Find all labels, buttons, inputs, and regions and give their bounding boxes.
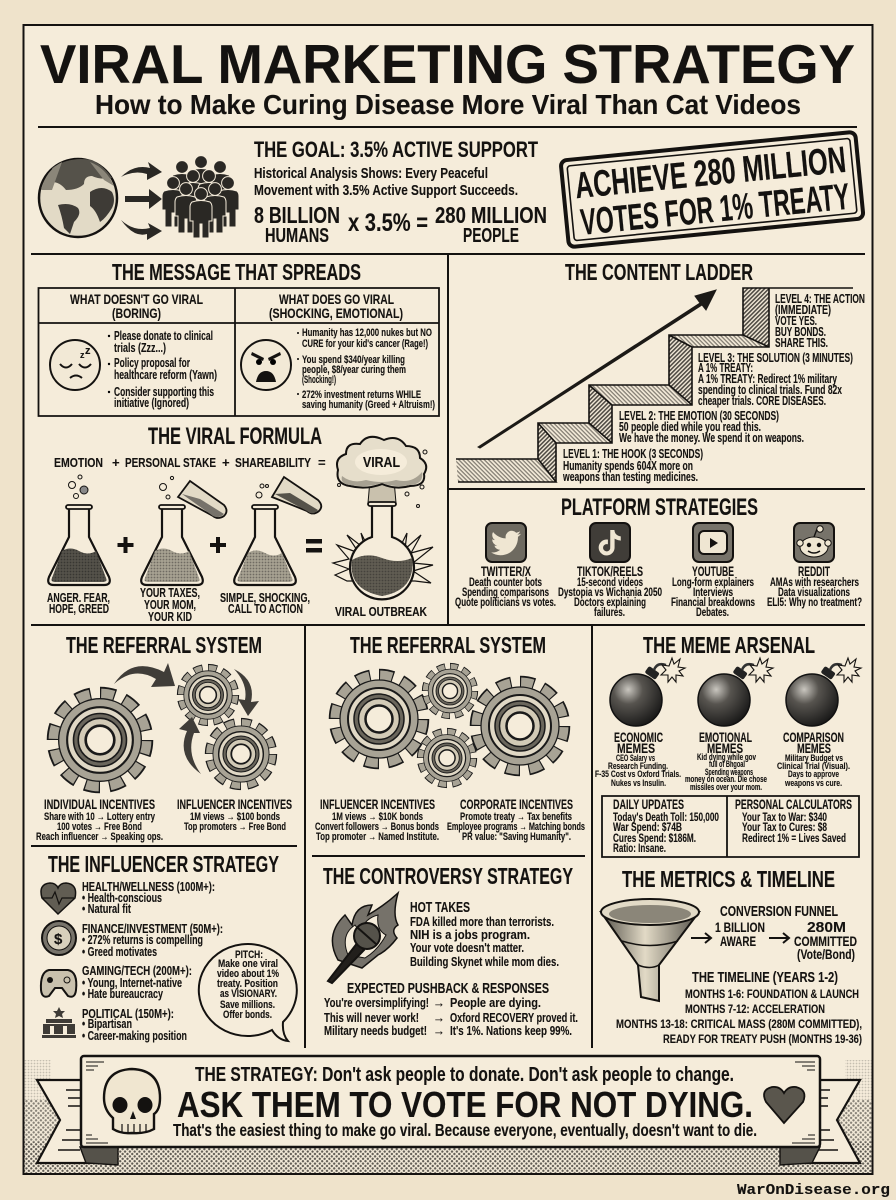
icon: skull — [104, 1069, 160, 1133]
list: viral messages: CURE for your kid's cancer (Rage!) — [302, 338, 428, 350]
formula text — [54, 455, 326, 470]
comparison table — [38, 288, 439, 416]
icon: bomb 1 — [610, 658, 685, 726]
flask labels — [47, 586, 310, 624]
individual incentives: Reach influencer → Speaking ops. — [36, 831, 163, 843]
icon: crowd of people — [162, 156, 239, 238]
panel: the content ladder — [456, 259, 865, 484]
corporate incentives: CORPORATE INCENTIVES — [460, 797, 573, 812]
timeline: THE TIMELINE (YEARS 1-2) — [692, 970, 838, 986]
tiktok text: TIKTOK/REELS — [577, 564, 643, 579]
level 2 text: LEVEL 2: THE EMOTION (30 SECONDS) — [619, 409, 779, 423]
list: viral messages — [297, 327, 435, 411]
list: viral messages: people, $8/year curing them — [302, 364, 406, 376]
twitter text: TWITTER/X — [481, 564, 531, 579]
flask labels: YOUR TAXES, — [140, 586, 200, 600]
hot takes: HOT TAKES — [410, 900, 470, 916]
equation: HUMANS — [265, 225, 329, 247]
reddit text: AMAs with researchers — [770, 577, 859, 589]
level 4 text: SHARE THIS. — [775, 336, 828, 350]
economic memes: ECONOMIC — [614, 730, 663, 745]
pitch speech bubble: Offer bonds. — [223, 1009, 272, 1021]
icon: angry face — [241, 340, 291, 390]
heading: THE VIRAL FORMULA — [148, 423, 322, 450]
twitter text: Spending comparisons — [462, 587, 549, 599]
youtube text: Interviews — [693, 587, 733, 599]
conversion funnel: COMMITTED — [794, 933, 857, 949]
comparison memes: Military Budget vs — [785, 753, 843, 764]
icon: game controller — [41, 970, 76, 997]
list: boring messages: Please donate to clinical — [114, 329, 213, 343]
influencer lists: POLITICAL (150M+): — [82, 1007, 174, 1021]
icon: sleepy face — [50, 340, 100, 390]
tiktok text: failures. — [594, 607, 625, 619]
list: viral messages: (Shocking!) — [302, 374, 336, 386]
reddit text: Data visualizations — [778, 587, 850, 599]
icon: sleepy face: z — [85, 345, 91, 357]
conversion funnel: 280M — [807, 919, 846, 936]
comparison memes: Clinical Trial (Visual). — [777, 761, 850, 772]
heading: THE CONTENT LADDER — [565, 259, 753, 285]
conversion funnel: AWARE — [720, 933, 756, 949]
banner: the strategy — [37, 1056, 860, 1165]
equation — [254, 202, 547, 247]
formula text: PERSONAL STAKE — [125, 455, 216, 470]
comparison table: WHAT DOESN'T GO VIRAL — [70, 292, 203, 307]
icon: heart — [41, 883, 76, 914]
comparison memes: Days to approve — [788, 769, 839, 780]
icon: sleepy face: z — [80, 350, 85, 360]
title: VIRAL MARKETING STRATEGY — [40, 33, 855, 95]
influencer lists: GAMING/TECH (200M+): — [82, 964, 192, 978]
conversion funnel — [691, 904, 857, 962]
flask 3: shareability — [234, 477, 321, 585]
comparison memes: weapons vs cure. — [784, 778, 842, 789]
influencer incentives: 1M views → $100 bonds — [190, 811, 280, 823]
list: boring messages: trials (Zzz...) — [114, 341, 166, 355]
pitch speech bubble: treaty. Position — [217, 978, 278, 990]
daily updates and calculators box: Your Tax to Cures: $8 — [742, 820, 827, 834]
panel: the influencer strategy — [41, 851, 297, 1043]
expected pushback and responses: EXPECTED PUSHBACK & RESPONSES — [347, 981, 549, 997]
list: viral messages: Humanity has 12,000 nukes but NO — [302, 327, 432, 339]
influencer lists: • Career-making position — [82, 1029, 187, 1043]
list: viral messages: 272% investment returns WHILE — [302, 389, 421, 401]
panel: the goal — [39, 132, 864, 247]
daily updates and calculators box: Redirect 1% = Lives Saved — [742, 831, 846, 845]
stair illustration — [456, 288, 853, 482]
panel: the meme arsenal — [595, 632, 861, 857]
pitch speech bubble: as VISIONARY. — [220, 988, 277, 1000]
equation: 8 BILLION — [254, 202, 340, 228]
twitter text — [455, 564, 556, 609]
daily updates and calculators box: Cures Spend: $186M. — [613, 831, 696, 845]
comparison table: (SHOCKING, EMOTIONAL) — [269, 306, 403, 321]
pitch speech bubble: Make one viral — [218, 958, 278, 970]
youtube text: Debates. — [696, 607, 729, 619]
daily updates and calculators box: DAILY UPDATES — [613, 797, 684, 812]
pitch speech bubble: video about 1% — [217, 968, 279, 980]
panel: the message that spreads — [38, 259, 439, 416]
goal explanation: Movement with 3.5% Active Support Succeeds. — [254, 183, 518, 199]
level 3 text: A 1% TREATY: — [698, 361, 753, 375]
influencer lists: • Hate bureaucracy — [82, 987, 163, 1001]
comparison memes: MEMES — [797, 741, 831, 756]
level 4 text: BUY BONDS. — [775, 325, 826, 339]
influencer lists: • Natural fit — [82, 902, 132, 916]
timeline: MONTHS 7-12: ACCELERATION — [685, 1002, 825, 1016]
goal heading: THE GOAL: 3.5% ACTIVE SUPPORT — [254, 137, 538, 162]
viral outbreak illustration: VIRAL — [363, 454, 400, 471]
level 4 text: (IMMEDIATE) — [775, 303, 831, 317]
ribbon body — [81, 1056, 820, 1147]
heading: THE MEME ARSENAL — [643, 632, 815, 658]
influencer lists — [82, 880, 223, 1043]
individual incentives: Share with 10 → Lottery entry — [44, 811, 156, 823]
pitch speech bubble — [199, 944, 297, 1041]
influencer lists: • Health-conscious — [82, 891, 162, 905]
heading: THE INFLUENCER STRATEGY — [48, 851, 279, 877]
level 2 text — [619, 409, 804, 445]
equation: PEOPLE — [463, 225, 519, 247]
level 2 text: We have the money. We spend it on weapons. — [619, 431, 804, 445]
comparison memes: COMPARISON — [783, 730, 844, 745]
corporate incentives: Employee programs → Matching bonds — [447, 821, 585, 833]
pitch speech bubble: PITCH: — [235, 949, 263, 961]
panel: the viral formula — [47, 423, 433, 624]
equation: x 3.5% = — [348, 209, 428, 237]
icon: flaming microphone — [328, 893, 398, 983]
emotional memes: EMOTIONAL — [699, 730, 752, 745]
daily updates and calculators box: Your Tax to War: $340 — [742, 810, 827, 824]
list: boring messages — [108, 329, 217, 410]
viral outbreak illustration — [333, 437, 433, 599]
subtitle: How to Make Curing Disease More Viral Than Cat Videos — [95, 89, 801, 120]
daily updates and calculators box: Ratio: Insane. — [613, 841, 666, 855]
flask 1: emotion — [48, 475, 110, 585]
headline: ASK THEM TO VOTE FOR NOT DYING. — [177, 1084, 753, 1125]
flask labels: YOUR MOM, — [144, 598, 196, 612]
arrow: upward trend — [478, 290, 716, 448]
emotional memes: MEMES — [707, 741, 743, 756]
youtube text: Long-form explainers — [672, 577, 754, 589]
icon: interlocking gears — [335, 666, 564, 784]
level 3 text — [698, 351, 853, 408]
level 4 text — [775, 292, 865, 350]
arrows: world to people — [121, 162, 162, 240]
influencer incentives — [315, 797, 439, 843]
icon: bomb 3 — [786, 658, 861, 726]
youtube text: YOUTUBE — [692, 564, 734, 579]
expected pushback and responses: → — [433, 1023, 445, 1038]
list: boring messages: healthcare reform (Yawn) — [114, 368, 217, 382]
emotional memes — [685, 730, 767, 792]
reddit text — [767, 564, 862, 609]
operators — [118, 537, 322, 553]
panel: referral system, individual — [36, 632, 292, 843]
influencer incentives: INFLUENCER INCENTIVES — [320, 797, 435, 812]
twitter text: Quote politicians vs votes. — [455, 597, 556, 609]
timeline — [616, 970, 862, 1046]
formula text: = — [318, 455, 326, 470]
individual incentives: 100 votes → Free Bond — [57, 821, 142, 833]
individual incentives: INDIVIDUAL INCENTIVES — [44, 797, 155, 812]
influencer lists: • 272% returns is compelling — [82, 933, 203, 947]
expected pushback and responses: → — [433, 995, 445, 1010]
emotional memes: Spending weapons — [705, 767, 753, 777]
conversion funnel: 1 BILLION — [715, 919, 765, 935]
ribbon tails — [37, 1080, 860, 1165]
economic memes: Nukes vs Insulin. — [611, 778, 666, 789]
hot takes: Your vote doesn't matter. — [410, 940, 524, 955]
heading: THE MESSAGE THAT SPREADS — [112, 259, 361, 285]
level 1 text — [562, 447, 703, 484]
influencer incentives: Convert followers → Bonus bonds — [315, 821, 439, 833]
conversion funnel: (Vote/Bond) — [797, 946, 855, 962]
list: boring messages: initiative (Ignored) — [114, 396, 189, 410]
goal explanation — [254, 166, 518, 199]
strategy text: THE STRATEGY: Don't ask people to donate. Don't ask people to change. — [195, 1064, 734, 1086]
emotional memes: Kid dying while gov — [697, 752, 756, 762]
icon: tiktok — [590, 523, 630, 562]
website credit: WarOnDisease.org — [737, 1182, 890, 1199]
icon: heart — [764, 1087, 804, 1123]
formula text: SHAREABILITY — [235, 455, 311, 470]
influencer incentives — [177, 797, 292, 833]
influencer incentives: Top promoters → Free Bond — [184, 821, 286, 833]
heading: PLATFORM STRATEGIES — [561, 494, 758, 521]
icon: gears with arrows — [53, 663, 273, 787]
panel: the metrics and timeline — [601, 866, 862, 1046]
icon: bomb 2 — [698, 658, 773, 726]
icon: globe — [39, 159, 117, 237]
expected pushback and responses: → — [433, 1010, 445, 1025]
reddit text: REDDIT — [798, 564, 830, 579]
heading: THE CONTROVERSY STRATEGY — [323, 863, 573, 889]
pitch speech bubble: Save millions. — [220, 999, 275, 1011]
daily updates and calculators box: War Spend: $74B — [613, 820, 682, 834]
youtube text: Financial breakdowns — [671, 597, 755, 609]
influencer lists: • Bipartisan — [82, 1017, 132, 1031]
hot takes: Building Skynet while mom dies. — [410, 954, 559, 969]
influencer incentives: INFLUENCER INCENTIVES — [177, 797, 292, 812]
comparison table: (BORING) — [112, 306, 161, 321]
economic memes — [595, 730, 681, 789]
flask labels: SIMPLE, SHOCKING, — [220, 591, 310, 605]
corporate incentives: Promote treaty → Tax benefits — [460, 811, 572, 823]
expected pushback and responses — [324, 981, 578, 1038]
level 1 text: LEVEL 1: THE HOOK (3 SECONDS) — [563, 447, 703, 461]
formula text: EMOTION — [54, 455, 103, 470]
hot takes: FDA killed more than terrorists. — [410, 914, 554, 929]
daily updates and calculators box — [602, 796, 859, 857]
panel: the controversy strategy — [323, 863, 578, 1038]
tiktok text — [558, 564, 662, 619]
expected pushback and responses: This will never work! — [324, 1010, 419, 1025]
expected pushback and responses: You're oversimplifying! — [324, 995, 429, 1010]
influencer incentives: 1M views → $10K bonds — [332, 811, 423, 823]
level 1 text: weapons than testing medicines. — [562, 470, 698, 484]
panel: platform strategies — [455, 494, 862, 619]
economic memes: Research Funding. — [608, 761, 668, 772]
panel: referral system, corporate — [315, 632, 585, 843]
icon: capitol building — [42, 1007, 76, 1038]
tiktok text: Dystopia vs Wichania 2050 — [558, 587, 662, 599]
daily updates and calculators box: Today's Death Toll: 150,000 — [613, 810, 719, 824]
flask labels: HOPE, GREED — [49, 602, 109, 616]
tiktok text: Doctors explaining — [574, 597, 646, 609]
influencer incentives: Top promoter → Named Institute. — [316, 831, 439, 843]
list: viral messages: saving humanity (Greed + Altruism!) — [302, 399, 435, 411]
icon: coin: $ — [54, 931, 63, 948]
influencer lists: HEALTH/WELLNESS (100M+): — [82, 880, 215, 894]
heading: THE REFERRAL SYSTEM — [66, 632, 262, 658]
level 1 text: Humanity spends 604X more on — [563, 459, 693, 473]
heading: THE REFERRAL SYSTEM — [350, 632, 546, 658]
icon: funnel — [601, 899, 699, 1001]
list: viral messages: You spend $340/year killing — [302, 354, 405, 366]
youtube text — [671, 564, 755, 619]
conversion funnel: CONVERSION FUNNEL — [720, 904, 838, 920]
flask labels: ANGER. FEAR, — [47, 591, 110, 605]
influencer lists: • Greed motivates — [82, 945, 157, 959]
list: boring messages: Policy proposal for — [114, 356, 190, 370]
expected pushback and responses: People are dying. — [450, 995, 541, 1010]
goal explanation: Historical Analysis Shows: Every Peaceful — [254, 166, 488, 182]
icon: youtube — [693, 523, 733, 562]
economic memes: CEO Salary vs — [616, 753, 655, 764]
comparison table: WHAT DOES GO VIRAL — [279, 292, 394, 307]
influencer lists: FINANCE/INVESTMENT (50M+): — [82, 922, 223, 936]
economic memes: MEMES — [617, 741, 655, 756]
hot takes: NIH is a jobs program. — [410, 927, 530, 942]
emotional memes: missiles over your mom. — [690, 782, 762, 792]
level 3 text: cheaper trials. CORE DISEASES. — [698, 394, 826, 408]
level 2 text: 50 people died while you read this. — [619, 420, 761, 434]
expected pushback and responses: It's 1%. Nations keep 99%. — [450, 1023, 572, 1038]
corporate incentives — [447, 797, 585, 843]
stamp callout — [561, 132, 864, 247]
hot takes — [410, 900, 559, 969]
comparison memes — [777, 730, 850, 789]
expected pushback and responses: Military needs budget! — [324, 1023, 427, 1038]
icon: twitter — [486, 523, 526, 562]
influencer lists: • Young, Internet-native — [82, 976, 182, 990]
formula text: + — [112, 455, 120, 470]
individual incentives — [36, 797, 163, 843]
equation: 280 MILLION — [435, 202, 547, 228]
flask labels: CALL TO ACTION — [228, 602, 303, 616]
list: boring messages: Consider supporting this — [114, 385, 214, 399]
label: viral outbreak: VIRAL OUTBREAK — [335, 604, 427, 619]
twitter text: Death counter bots — [469, 577, 542, 589]
icon: coin — [42, 921, 76, 955]
level 4 text: VOTE YES. — [775, 314, 817, 328]
emotional memes: full of Bhgoal — [709, 759, 745, 769]
icon: reddit — [794, 523, 834, 562]
tiktok text: 15-second videos — [577, 577, 643, 589]
emotional memes: money on ocean. Die chose — [685, 774, 767, 784]
corporate incentives: PR value: "Saving Humanity". — [462, 831, 571, 843]
flask 2: personal stake — [141, 476, 226, 585]
expected pushback and responses: Oxford RECOVERY proved it. — [450, 1010, 578, 1025]
flask labels: YOUR KID — [148, 610, 192, 624]
halftone base band — [24, 1060, 872, 1173]
formula text: + — [222, 455, 230, 470]
economic memes: F-35 Cost vs Oxford Trials. — [595, 769, 681, 780]
